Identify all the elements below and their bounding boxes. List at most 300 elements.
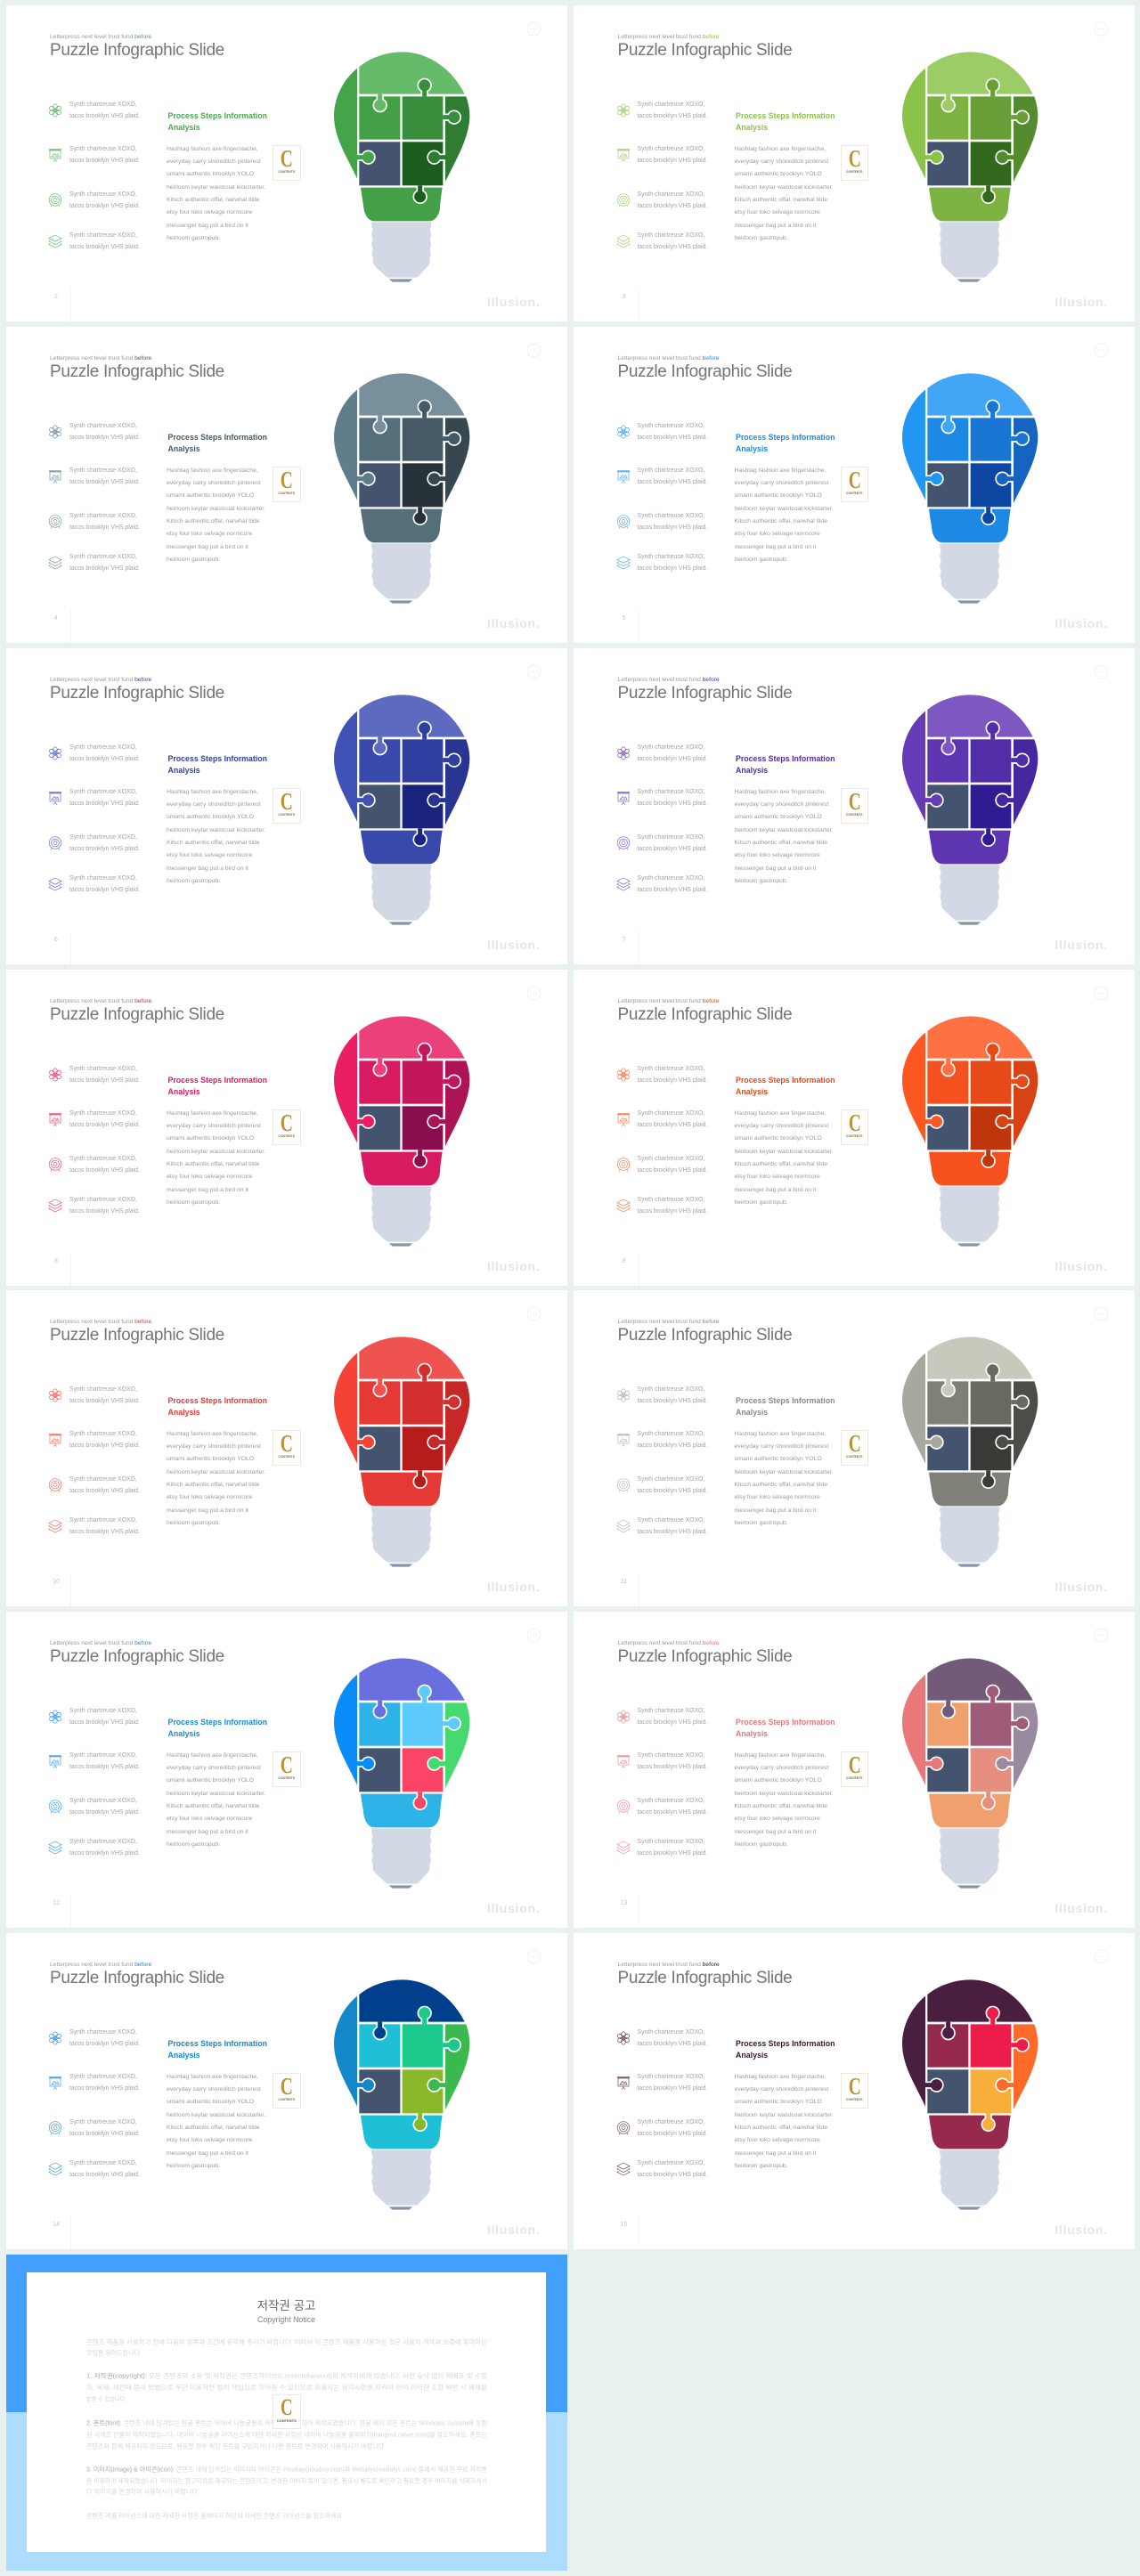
heading	[167, 753, 267, 776]
subtitle: Letterpress next level trust fund before	[50, 998, 151, 1004]
paragraph: messenger bag put a bird on it	[167, 1829, 248, 1835]
paragraph	[167, 2071, 265, 2173]
paragraph: everyday carry shoreditch pinterest	[167, 2086, 261, 2092]
logo badge: C	[848, 145, 860, 172]
feature row 3: tacos brooklyn VHS plaid.	[69, 1166, 140, 1174]
feature row 2	[49, 789, 140, 807]
puzzle light bulb	[871, 1642, 1067, 1900]
feature row 3	[616, 191, 707, 208]
page number: 12	[53, 1900, 60, 1906]
paragraph: Kitsch authentic offal, narwhal tilde	[167, 197, 260, 203]
feature row 3: tacos brooklyn VHS plaid.	[69, 203, 140, 208]
logo badge	[273, 2073, 301, 2109]
feature row 1: tacos brooklyn VHS plaid.	[69, 435, 140, 440]
logo badge: CONTENTS	[846, 2098, 863, 2101]
logo badge: CONTENTS	[278, 170, 295, 174]
logo badge	[841, 145, 868, 181]
feature row 2: Synth chartreuse XOXO,	[69, 467, 137, 474]
paragraph	[167, 1750, 265, 1851]
paragraph: Kitsch authentic offal, narwhal tilde	[167, 518, 260, 524]
feature row 2: Synth chartreuse XOXO,	[638, 1430, 704, 1437]
feature row 3: Synth chartreuse XOXO,	[69, 833, 137, 841]
paragraph: Kitsch authentic offal, narwhal tilde	[734, 1482, 827, 1488]
paragraph	[734, 1108, 834, 1209]
subtitle: Letterpress next level trust fund before	[618, 998, 720, 1004]
heading: Process Steps Information	[736, 2039, 835, 2048]
feature row 2	[616, 1428, 723, 1451]
feature row 1: Synth chartreuse XOXO,	[638, 1708, 704, 1713]
heading: Analysis	[167, 2050, 200, 2059]
feature row 2	[49, 146, 140, 164]
paragraph: everyday carry shoreditch pinterest	[734, 2086, 828, 2092]
heading: Process Steps Information	[736, 1717, 835, 1726]
brand: Illusion.	[1054, 1580, 1108, 1594]
feature row 1	[616, 1063, 723, 1086]
paragraph: heirloom gastropub.	[734, 1520, 788, 1526]
panel: blue slide	[574, 327, 1135, 643]
feature row 1: Synth chartreuse XOXO,	[69, 102, 137, 107]
logo badge: C	[848, 467, 860, 493]
logo badge: C	[848, 2073, 860, 2100]
puzzle light bulb	[871, 1321, 1067, 1579]
feature row 3: tacos brooklyn VHS plaid.	[69, 846, 140, 851]
feature row 4: tacos brooklyn VHS plaid.	[638, 565, 707, 572]
paragraph: Hashtag fashion axe fingerstache,	[167, 146, 258, 152]
feature row 3	[616, 513, 707, 531]
feature row 2	[616, 785, 723, 809]
feature row 2: tacos brooklyn VHS plaid.	[638, 2085, 707, 2091]
heading: Process Steps Information	[167, 1717, 267, 1726]
feature row 1	[617, 422, 707, 440]
feature row 3: tacos brooklyn VHS plaid.	[638, 1809, 707, 1815]
feature row 4: tacos brooklyn VHS plaid.	[638, 1528, 707, 1535]
heading	[167, 110, 267, 132]
page number: 6	[54, 937, 58, 943]
logo overlay	[273, 2394, 301, 2429]
feature row 3: tacos brooklyn VHS plaid.	[69, 2130, 140, 2137]
paragraph: everyday carry shoreditch pinterest	[167, 1123, 261, 1129]
paragraph: heirloom gastropub.	[167, 2163, 220, 2169]
logo badge	[273, 1109, 301, 1145]
heading: Process Steps Information	[736, 1076, 835, 1085]
subtitle: Letterpress next level trust fund before	[618, 1640, 720, 1646]
feature row 3	[48, 191, 140, 208]
feature row 1: tacos brooklyn VHS plaid.	[638, 1719, 707, 1726]
feature row 2: Synth chartreuse XOXO,	[638, 467, 704, 474]
feature row 2: tacos brooklyn VHS plaid.	[69, 1122, 140, 1127]
feature row 3: tacos brooklyn VHS plaid.	[638, 1166, 707, 1174]
paragraph: Kitsch authentic offal, narwhal tilde	[167, 1161, 260, 1167]
paragraph: heirloom keytar waistcoat kickstarter.	[734, 827, 834, 833]
paragraph: everyday carry shoreditch pinterest	[167, 1765, 261, 1771]
feature row 3: tacos brooklyn VHS plaid.	[638, 1487, 707, 1494]
feature row 2: tacos brooklyn VHS plaid.	[638, 1122, 707, 1127]
feature row 3: tacos brooklyn VHS plaid.	[69, 524, 140, 531]
panel: indigo slide	[5, 648, 566, 964]
puzzle light bulb	[871, 1000, 1067, 1258]
feature row 3	[48, 1473, 155, 1496]
feature row 4	[616, 1193, 723, 1216]
paragraph: Hashtag fashion axe fingerstache,	[734, 146, 826, 152]
paragraph: Kitsch authentic offal, narwhal tilde	[734, 2125, 827, 2131]
heading: Analysis	[736, 443, 768, 452]
feature row 1: Synth chartreuse XOXO,	[69, 744, 137, 750]
page number: 9	[623, 1258, 625, 1264]
page number: 13	[621, 1900, 627, 1906]
paragraph: messenger bag put a bird on it	[167, 544, 248, 550]
title: Puzzle Infographic Slide	[618, 684, 792, 703]
logo badge: CONTENTS	[846, 813, 863, 817]
heading	[167, 433, 267, 453]
logo badge	[841, 2073, 868, 2109]
feature row 4	[48, 1836, 155, 1859]
heading: Process Steps Information	[167, 753, 267, 762]
paragraph: heirloom gastropub.	[167, 878, 220, 884]
paragraph: messenger bag put a bird on it	[734, 1829, 816, 1835]
subtitle: Letterpress next level trust fund before	[618, 1962, 720, 1968]
feature row 4: Synth chartreuse XOXO,	[638, 1838, 704, 1845]
heading	[167, 2037, 267, 2060]
panel: wine multicolor slide	[574, 1933, 1135, 2249]
brand: Illusion.	[1054, 1901, 1108, 1915]
logo overlay: CONTENTS	[277, 2418, 297, 2423]
feature row 3	[48, 832, 155, 855]
feature row 1: Synth chartreuse XOXO,	[69, 422, 137, 429]
feature row 2: tacos brooklyn VHS plaid.	[638, 1763, 707, 1770]
feature row 1: tacos brooklyn VHS plaid.	[69, 1719, 140, 1726]
feature row 2: tacos brooklyn VHS plaid.	[69, 157, 140, 164]
subtitle: Letterpress next level trust fund before	[50, 34, 151, 40]
title: Puzzle Infographic Slide	[618, 1647, 792, 1666]
page number: 2	[54, 294, 58, 300]
feature row 1: Synth chartreuse XOXO,	[638, 1386, 704, 1393]
heading	[167, 1717, 267, 1740]
feature row 4: tacos brooklyn VHS plaid.	[69, 244, 140, 249]
brand: Illusion.	[487, 1259, 540, 1273]
logo badge: C	[848, 788, 860, 815]
feature row 2: Synth chartreuse XOXO,	[69, 2073, 137, 2080]
page number: 3	[623, 294, 625, 300]
panel: warm gray slide	[574, 1290, 1135, 1606]
logo badge: CONTENTS	[846, 1776, 863, 1780]
heading	[736, 753, 835, 776]
feature row 2: Synth chartreuse XOXO,	[638, 789, 704, 794]
feature row 1	[616, 1704, 723, 1727]
paragraph: everyday carry shoreditch pinterest	[734, 1123, 828, 1129]
title: Puzzle Infographic Slide	[618, 1005, 792, 1024]
paragraph: etsy four loko selvage normcore	[167, 1816, 252, 1822]
logo badge: CONTENTS	[846, 170, 863, 174]
heading: Analysis	[736, 1086, 768, 1095]
subtitle: Letterpress next level trust fund before	[50, 677, 151, 683]
panel: muted multicolor slide	[574, 1612, 1135, 1928]
icon: menu	[1094, 21, 1108, 36]
title: Puzzle Infographic Slide	[618, 362, 792, 381]
feature row 1	[616, 1384, 723, 1407]
panel: copyright notice	[5, 2255, 566, 2571]
paragraph: heirloom keytar waistcoat kickstarter.	[167, 1791, 265, 1797]
feature row 2	[48, 1749, 155, 1772]
brand: Illusion.	[1054, 938, 1108, 952]
paragraph: heirloom gastropub.	[167, 1841, 220, 1848]
paragraph: heirloom keytar waistcoat kickstarter.	[167, 1149, 265, 1155]
feature row 2: tacos brooklyn VHS plaid.	[638, 157, 707, 164]
feature row 3: Synth chartreuse XOXO,	[69, 1156, 137, 1161]
feature row 4	[48, 1193, 155, 1216]
english heading: Copyright Notice	[257, 2315, 315, 2324]
feature row 3: Synth chartreuse XOXO,	[638, 513, 704, 518]
feature row 1	[49, 102, 140, 119]
brand: Illusion.	[1054, 616, 1108, 630]
icon: menu	[525, 1306, 542, 1321]
heading: Analysis	[736, 2050, 768, 2059]
feature row 4: tacos brooklyn VHS plaid.	[69, 1207, 140, 1215]
brand: Illusion.	[487, 616, 540, 630]
feature row 4	[616, 1836, 723, 1859]
paragraph: Kitsch authentic offal, narwhal tilde	[167, 840, 260, 846]
notice body text: 콘텐츠 제품을 사용하기 전에 다음의 항목과 조건에 유의해 주시기 바랍니다. 따라서 이 콘텐츠 제품을 사용하는 것은 사용자 계약과 보증에 동의하는	[86, 2338, 488, 2345]
feature row 3: tacos brooklyn VHS plaid.	[638, 203, 707, 208]
feature row 4	[616, 873, 723, 896]
title: Puzzle Infographic Slide	[618, 1326, 792, 1345]
page number: 10	[53, 1579, 60, 1585]
feature row 4: tacos brooklyn VHS plaid.	[69, 565, 140, 572]
panel: pink slide	[5, 970, 566, 1286]
brand: Illusion.	[487, 1901, 540, 1915]
heading: Analysis	[167, 123, 200, 132]
feature row 1: Synth chartreuse XOXO,	[638, 102, 704, 107]
paragraph: Kitsch authentic offal, narwhal tilde	[167, 2125, 260, 2131]
icon: menu	[525, 1949, 542, 1964]
notice body text: 이, 복제, 재판매 등의 방법으로 무단 이용하면 법적 책임으로 이어질 수 있으므로 이용자는 유의사항을 지켜야 하며 이러한 조항 위반 시 제재를	[86, 2383, 488, 2392]
paragraph	[167, 146, 265, 241]
paragraph: everyday carry shoreditch pinterest	[167, 801, 261, 808]
feature row 1: tacos brooklyn VHS plaid.	[69, 1398, 140, 1403]
feature row 4	[616, 1514, 723, 1537]
feature row 1	[48, 1063, 155, 1086]
heading: Process Steps Information	[167, 1076, 267, 1085]
page number: 11	[621, 1579, 627, 1585]
feature row 2	[617, 467, 707, 484]
feature row 2: Synth chartreuse XOXO,	[638, 1752, 704, 1758]
logo badge: C	[281, 1430, 293, 1457]
feature row 1	[616, 741, 723, 764]
paragraph: heirloom keytar waistcoat kickstarter.	[167, 2112, 265, 2118]
panel: deep purple slide	[574, 648, 1135, 964]
paragraph: Kitsch authentic offal, narwhal tilde	[734, 518, 827, 524]
heading	[736, 433, 835, 453]
feature row 1: tacos brooklyn VHS plaid.	[638, 755, 707, 762]
feature row 3: Synth chartreuse XOXO,	[638, 1797, 704, 1804]
feature row 4	[616, 554, 707, 572]
heading	[736, 2037, 835, 2060]
subtitle: Letterpress next level trust fund before	[50, 1319, 151, 1325]
paragraph: Hashtag fashion axe fingerstache,	[734, 467, 826, 474]
puzzle light bulb	[303, 1642, 499, 1900]
feature row 3: Synth chartreuse XOXO,	[69, 2119, 137, 2125]
feature row 3	[48, 513, 140, 531]
paragraph: heirloom keytar waistcoat kickstarter.	[167, 827, 265, 833]
paragraph: umami authentic brooklyn YOLO	[167, 171, 254, 177]
paragraph: Hashtag fashion axe fingerstache,	[734, 1431, 826, 1437]
feature row 4: Synth chartreuse XOXO,	[69, 1517, 137, 1523]
paragraph: messenger bag put a bird on it	[734, 2150, 816, 2157]
notice body text: 2. 폰트(font): 콘텐츠 내에 담겨있는 한글 폰트는 네이버 나눔글꼴의 저작권을 준수하여 제작되었습니다. 한글 외의 모든 폰트는 Windows System에 포함	[86, 2418, 488, 2427]
paragraph: umami authentic brooklyn YOLO	[734, 171, 822, 177]
brand: Illusion.	[1054, 295, 1108, 309]
paragraph: etsy four loko selvage normcore	[734, 1494, 820, 1500]
brand: Illusion.	[1054, 1259, 1108, 1273]
paragraph: umami authentic brooklyn YOLO	[167, 1777, 254, 1784]
paragraph: Hashtag fashion axe fingerstache,	[167, 1431, 258, 1437]
paragraph: Hashtag fashion axe fingerstache,	[167, 1752, 258, 1759]
paragraph: heirloom keytar waistcoat kickstarter.	[167, 1469, 265, 1475]
logo badge: CONTENTS	[278, 1134, 295, 1138]
paragraph: umami authentic brooklyn YOLO	[734, 1135, 822, 1142]
icon: menu	[1094, 1949, 1109, 1964]
panel: teal multicolor slide	[5, 1933, 566, 2249]
feature row 1: tacos brooklyn VHS plaid.	[638, 2041, 707, 2046]
paragraph: Hashtag fashion axe fingerstache,	[167, 1110, 258, 1117]
feature row 4: Synth chartreuse XOXO,	[69, 874, 137, 882]
paragraph: umami authentic brooklyn YOLO	[734, 814, 822, 820]
heading: Process Steps Information	[167, 2039, 267, 2048]
feature row 3: Synth chartreuse XOXO,	[69, 1476, 137, 1482]
logo badge	[273, 467, 301, 502]
logo badge: C	[281, 1751, 293, 1778]
title: Puzzle Infographic Slide	[50, 41, 224, 60]
feature row 4: Synth chartreuse XOXO,	[638, 874, 704, 882]
feature row 1	[49, 422, 140, 440]
logo badge	[841, 1430, 868, 1466]
paragraph	[734, 2071, 834, 2173]
feature row 4	[616, 2157, 723, 2180]
feature row 2: Synth chartreuse XOXO,	[69, 1109, 137, 1117]
heading: Process Steps Information	[736, 1396, 835, 1405]
heading: Process Steps Information	[736, 753, 835, 762]
icon: menu	[527, 21, 542, 36]
logo badge	[841, 467, 868, 502]
paragraph: everyday carry shoreditch pinterest	[734, 801, 828, 808]
feature row 1: Synth chartreuse XOXO,	[638, 1065, 704, 1072]
feature row 1	[616, 2027, 723, 2050]
feature row 3: Synth chartreuse XOXO,	[638, 1156, 704, 1161]
feature row 3: Synth chartreuse XOXO,	[69, 513, 137, 518]
feature row 2	[48, 1108, 155, 1131]
logo badge	[273, 1430, 301, 1466]
feature row 4: Synth chartreuse XOXO,	[69, 554, 137, 559]
feature row 2: tacos brooklyn VHS plaid.	[69, 479, 140, 484]
logo badge: CONTENTS	[846, 492, 863, 495]
paragraph: etsy four loko selvage normcore	[167, 209, 252, 215]
puzzle light bulb	[334, 52, 470, 282]
feature row 4: tacos brooklyn VHS plaid.	[638, 887, 707, 892]
logo badge	[273, 145, 301, 181]
feature row 1: tacos brooklyn VHS plaid.	[638, 435, 707, 440]
logo badge: CONTENTS	[278, 1455, 295, 1459]
feature row 2	[49, 467, 140, 484]
feature row 3: Synth chartreuse XOXO,	[638, 1476, 704, 1482]
logo badge: C	[848, 1751, 860, 1778]
paragraph: Kitsch authentic offal, narwhal tilde	[167, 1482, 260, 1488]
heading: Analysis	[167, 1086, 200, 1095]
logo badge	[841, 1751, 868, 1787]
puzzle light bulb	[303, 1963, 499, 2222]
heading: Analysis	[736, 1407, 768, 1416]
feature row 4: Synth chartreuse XOXO,	[638, 232, 704, 239]
heading: Analysis	[167, 766, 200, 775]
paragraph: heirloom gastropub.	[734, 2163, 788, 2169]
heading: Analysis	[736, 1729, 768, 1738]
paragraph: etsy four loko selvage normcore	[167, 1174, 252, 1180]
panel: green slide	[5, 5, 566, 321]
paragraph: messenger bag put a bird on it	[167, 865, 248, 872]
feature row 1: tacos brooklyn VHS plaid.	[69, 755, 140, 762]
feature row 2: tacos brooklyn VHS plaid.	[638, 479, 707, 484]
page number: 7	[623, 937, 625, 943]
paragraph: messenger bag put a bird on it	[167, 1187, 248, 1193]
feature row 2: Synth chartreuse XOXO,	[638, 1109, 704, 1117]
feature row 1: tacos brooklyn VHS plaid.	[638, 1398, 707, 1403]
paragraph: heirloom keytar waistcoat kickstarter.	[734, 184, 834, 191]
title: Puzzle Infographic Slide	[618, 41, 792, 60]
paragraph: etsy four loko selvage normcore	[734, 1816, 820, 1822]
paragraph: everyday carry shoreditch pinterest	[734, 480, 828, 486]
heading	[736, 1074, 835, 1097]
paragraph: umami authentic brooklyn YOLO	[734, 492, 822, 499]
feature row 3	[48, 1152, 155, 1175]
feature row 4: Synth chartreuse XOXO,	[69, 232, 137, 239]
page number: 15	[621, 2222, 627, 2228]
feature row 3: tacos brooklyn VHS plaid.	[638, 524, 707, 531]
paragraph: everyday carry shoreditch pinterest	[734, 1765, 828, 1771]
paragraph	[734, 467, 834, 563]
feature row 4: tacos brooklyn VHS plaid.	[69, 2171, 140, 2178]
paragraph: Hashtag fashion axe fingerstache,	[734, 1110, 826, 1117]
title: Puzzle Infographic Slide	[50, 1326, 224, 1345]
feature row 3: tacos brooklyn VHS plaid.	[638, 2130, 707, 2137]
paragraph: heirloom keytar waistcoat kickstarter.	[734, 2112, 834, 2118]
page number: 5	[623, 615, 625, 622]
brand: Illusion.	[1054, 2223, 1108, 2237]
feature row 1: tacos brooklyn VHS plaid.	[638, 1077, 707, 1083]
page number: 4	[54, 615, 58, 622]
paragraph	[734, 786, 834, 888]
feature row 2: tacos brooklyn VHS plaid.	[638, 1442, 707, 1448]
feature row 3	[616, 1152, 723, 1175]
logo badge: CONTENTS	[278, 1776, 295, 1780]
paragraph: etsy four loko selvage normcore	[734, 2137, 820, 2143]
paragraph: heirloom keytar waistcoat kickstarter.	[167, 184, 265, 191]
subtitle: Letterpress next level trust fund before	[50, 1640, 151, 1646]
feature row 2	[617, 146, 707, 164]
paragraph: Hashtag fashion axe fingerstache,	[167, 789, 258, 795]
paragraph: heirloom keytar waistcoat kickstarter.	[167, 506, 265, 512]
heading: Analysis	[736, 123, 768, 132]
feature row 2	[48, 2071, 155, 2094]
paragraph: Hashtag fashion axe fingerstache,	[734, 2074, 826, 2080]
notice body text: 다 이미지를 변경하여 사용하시기 바랍니다.	[86, 2488, 200, 2495]
feature row 3: Synth chartreuse XOXO,	[69, 1797, 137, 1804]
heading: Process Steps Information	[167, 1396, 267, 1405]
brand: Illusion.	[487, 2223, 540, 2237]
notice body text: 3. 이미지(image) & 아이콘(icon): 콘텐츠 내에 담겨있는 이미지와 아이콘은 Pixabay(pixabay.com)와 Webalys(webalys.com) 등에서 제공한 무료 저작물	[86, 2465, 488, 2474]
notice body text: 1. 저작권(copyright): 모든 콘텐츠의 소유 및 저작권은 콘텐츠하이브(Contentshareout)의 제작자에게 있습니다. 사전 승낙 없이 재배포 및 수정	[86, 2372, 487, 2379]
icon: menu	[1094, 344, 1108, 358]
feature row 2: Synth chartreuse XOXO,	[69, 1752, 137, 1758]
paragraph: messenger bag put a bird on it	[734, 223, 816, 229]
feature row 3: tacos brooklyn VHS plaid.	[638, 846, 707, 851]
